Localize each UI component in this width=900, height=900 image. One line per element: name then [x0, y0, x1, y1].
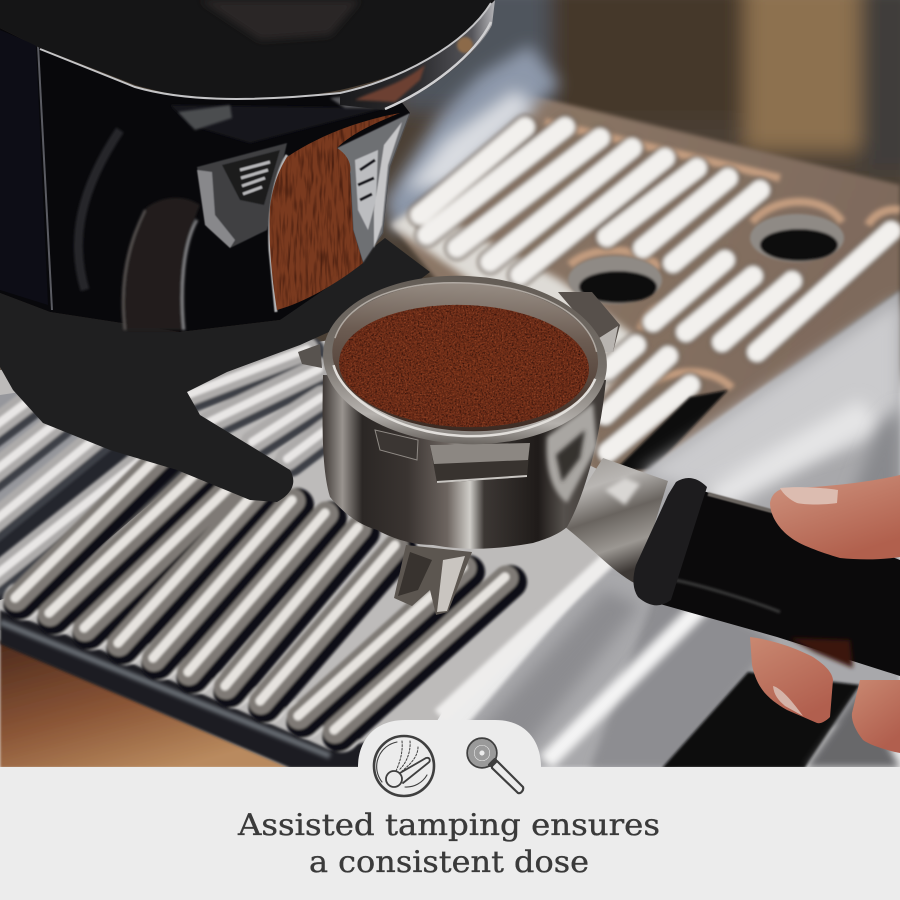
hand: lower fingers [750, 637, 900, 753]
wood counter [0, 640, 290, 768]
caption heading: Assisted tamping ensures [237, 808, 660, 843]
grinder glossy body [0, 28, 410, 332]
caption heading: a consistent dose [309, 845, 589, 880]
upper tray ridges [420, 127, 891, 452]
icon: assisted tamping dial [374, 736, 434, 796]
lower right shadow [662, 672, 900, 768]
portafilter lugs [298, 292, 620, 483]
grinder rear reflections [170, 105, 385, 143]
portafilter [298, 269, 900, 676]
grinder body reflections [78, 130, 200, 330]
blurred background behind machine [0, 0, 900, 380]
grinder left panel [0, 30, 48, 305]
lower tray back ridges [0, 349, 330, 585]
portafilter body [323, 375, 606, 549]
portafilter shoulder highlight [547, 403, 597, 503]
hand: upper finger [770, 475, 900, 559]
steel front panel [430, 290, 900, 768]
coffee grounds [337, 301, 591, 431]
grinder side vent [197, 143, 287, 248]
tray bright edge strip [440, 556, 612, 716]
grinder black fork [0, 238, 430, 502]
portafilter rubber collar [633, 478, 707, 605]
caption panel [0, 720, 900, 900]
grinder [0, 0, 495, 502]
grinder chrome band [40, 0, 495, 110]
portafilter spouts [394, 545, 472, 615]
icon: portafilter [468, 738, 523, 793]
portafilter black handle [660, 490, 900, 676]
lower tray base [0, 340, 620, 765]
grinder top cap [0, 0, 495, 100]
grinder chrome cradle [270, 113, 410, 312]
caption heading [237, 808, 660, 880]
drain slot [615, 390, 728, 470]
tray dark front edge [0, 610, 440, 768]
bronze rims around holes and ridges [545, 122, 900, 400]
portafilter chrome neck [556, 458, 668, 584]
portafilter rim [319, 269, 611, 451]
drain hole: middle [568, 256, 662, 304]
lower tray front ridges [15, 440, 510, 735]
drain hole: upper right [750, 214, 844, 262]
tray: right upper bronze plate [385, 45, 900, 480]
coffee window on grinder [269, 113, 400, 310]
